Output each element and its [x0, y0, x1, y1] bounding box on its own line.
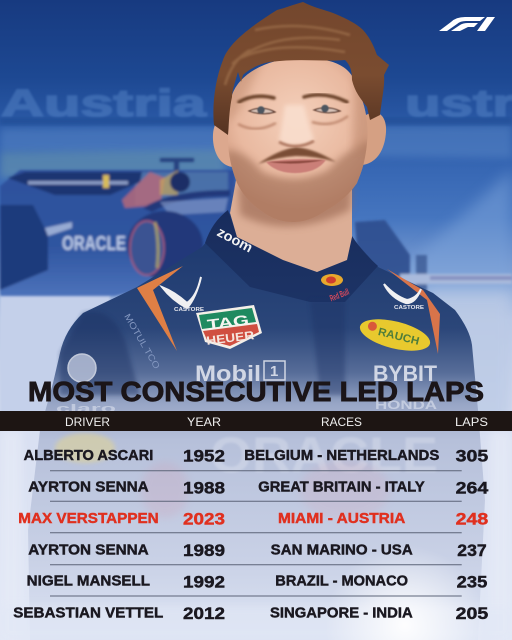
- ears: [213, 112, 386, 167]
- title: MOST CONSECUTIVE LED LAPS: [28, 376, 484, 407]
- row: Nigel Mansell: 1992: [183, 573, 225, 591]
- sleeve sponsor: MOTUL TCO: [122, 312, 162, 371]
- eyes: [238, 105, 348, 129]
- row: Alberto Ascari: ALBERTO ASCARI: [24, 448, 153, 464]
- TAG Heuer badge: HEUER: [206, 328, 255, 348]
- row: Nigel Mansell: [27, 573, 487, 591]
- row: Max Verstappen (highlighted): MIAMI - AUSTRIA: [278, 511, 406, 527]
- row: Ayrton Senna 1989: AYRTON SENNA: [28, 542, 149, 558]
- rear wing: [8, 172, 142, 195]
- F1 logo: [439, 17, 495, 31]
- row: Ayrton Senna 1989: 237: [457, 542, 487, 560]
- row: Ayrton Senna 1988: [28, 479, 489, 497]
- header: races: RACES: [321, 417, 362, 429]
- mouth: [266, 159, 326, 173]
- Red Bull logo: Red Bull: [328, 287, 351, 303]
- row: Sebastian Vettel: SEBASTIAN VETTEL: [13, 605, 163, 621]
- hair: [213, 2, 389, 135]
- row: Sebastian Vettel: [13, 605, 488, 623]
- Castore logo left: [162, 277, 205, 313]
- row: Ayrton Senna 1988: 264: [456, 479, 489, 497]
- Mobil 1 logo: Mobil: [195, 361, 261, 386]
- row: Nigel Mansell: NIGEL MANSELL: [27, 574, 150, 590]
- row: Max Verstappen (highlighted): 2023: [183, 511, 225, 529]
- row: Sebastian Vettel: 2012: [183, 605, 225, 623]
- Castore logo right: CASTORE: [394, 305, 425, 311]
- Castore logo left: CASTORE: [174, 307, 205, 313]
- ghost text: Austria banner: ustr: [405, 83, 512, 125]
- row: Nigel Mansell: BRAZIL - MONACO: [275, 574, 408, 590]
- row: Max Verstappen (highlighted): [18, 511, 488, 529]
- table header bar: [0, 411, 512, 431]
- orange shoulder stripes: [137, 266, 183, 351]
- Mobil 1 logo: [195, 361, 285, 386]
- row: Alberto Ascari: 1952: [183, 448, 225, 466]
- Castore logo right: [384, 284, 425, 311]
- racing suit: [28, 210, 485, 640]
- row: Ayrton Senna 1989: [28, 542, 487, 560]
- header: year: YEAR: [187, 417, 221, 429]
- row: Alberto Ascari: BELGIUM - NETHERLANDS: [244, 448, 440, 464]
- row: Alberto Ascari: [24, 448, 488, 466]
- stubble: [228, 67, 368, 222]
- ghost text: car sponsor: ORACLE: [62, 233, 126, 255]
- header: driver: DRIVER: [65, 417, 110, 429]
- header: laps: LAPS: [455, 417, 488, 429]
- row: Nigel Mansell: 235: [457, 573, 487, 591]
- lighter ground left and right: [0, 290, 512, 425]
- background: blurred circuit scene: [0, 83, 512, 425]
- TAG Heuer badge: [196, 305, 262, 349]
- Mobil 1 logo: 1: [270, 363, 278, 380]
- ghost suit details behind table: ORACLE: [210, 427, 438, 483]
- row: Alberto Ascari: 305: [456, 448, 488, 466]
- face: [228, 58, 368, 222]
- nose: [279, 105, 314, 146]
- TAG Heuer badge: TAG: [206, 311, 250, 332]
- moustache: [258, 147, 336, 164]
- row: Max Verstappen (highlighted): 248: [456, 511, 488, 529]
- Red Bull logo: [321, 274, 351, 303]
- row: Sebastian Vettel: SINGAPORE - INDIA: [270, 605, 413, 621]
- row: Ayrton Senna 1988: AYRTON SENNA: [28, 480, 149, 496]
- zoom collar logo: zoom: [215, 224, 256, 255]
- neck: [230, 180, 352, 272]
- ghost text: Austria banner: Austria: [1, 83, 207, 125]
- row: Max Verstappen (highlighted): MAX VERSTAPPEN: [18, 511, 159, 527]
- ghost suit details behind table: [0, 427, 512, 640]
- row: Ayrton Senna 1989: SAN MARINO - USA: [271, 542, 413, 558]
- ghost text: Austria banner: [1, 83, 512, 125]
- Rauch badge: RAUCH: [377, 326, 421, 348]
- row: Sebastian Vettel: 205: [456, 605, 488, 623]
- sleeve ghost text: claro: [56, 403, 117, 415]
- row: Ayrton Senna 1989: 1989: [183, 542, 225, 560]
- eyebrows: [239, 95, 347, 102]
- background car: [0, 158, 512, 297]
- Honda ghost text: HONDA: [375, 398, 437, 412]
- white sleeve badge: [68, 354, 96, 382]
- row: Ayrton Senna 1988: 1988: [183, 479, 225, 497]
- Rauch badge: [357, 313, 433, 357]
- row: Ayrton Senna 1988: GREAT BRITAIN - ITALY: [258, 480, 425, 496]
- Bybit logo: BYBIT: [373, 361, 438, 386]
